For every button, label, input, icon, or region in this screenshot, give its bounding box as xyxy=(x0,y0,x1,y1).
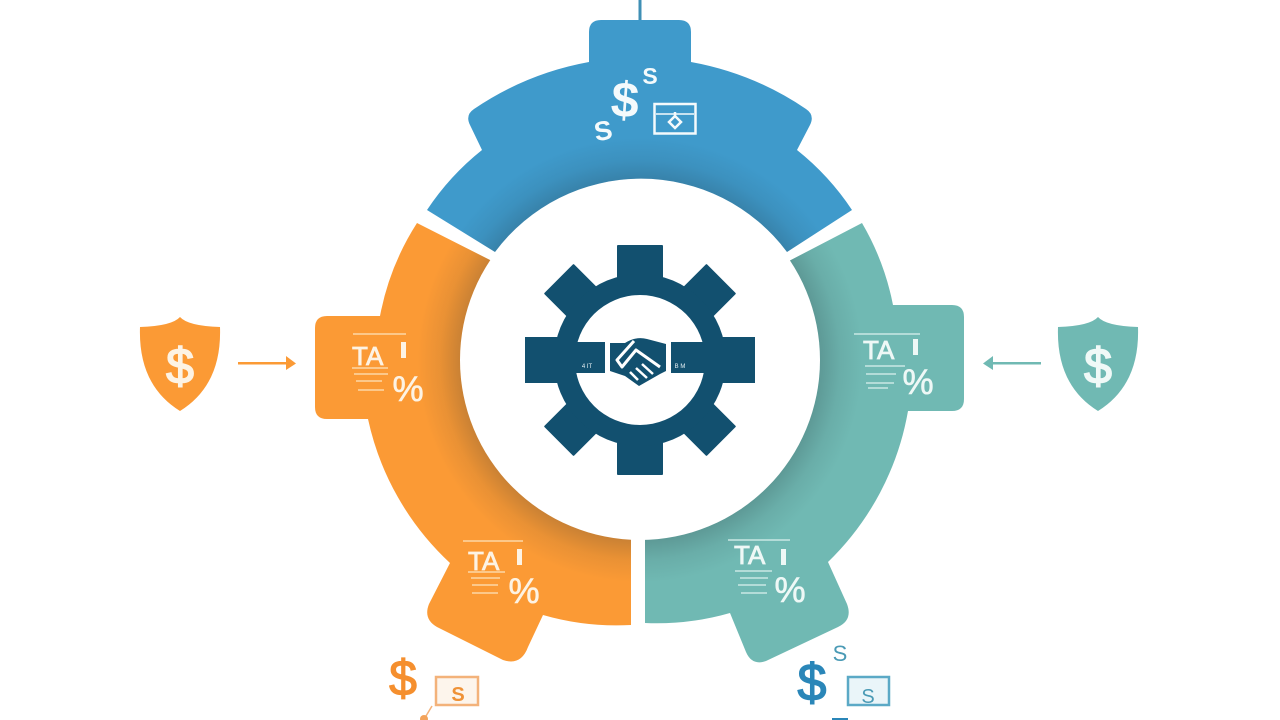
icon: tax percent left xyxy=(352,334,424,409)
icon: tax percent right xyxy=(854,334,934,402)
icon: bottom left dollar and note: S xyxy=(451,684,465,706)
arrow: teal pointing left xyxy=(983,356,1041,370)
icon: tax percent right: % xyxy=(902,363,934,402)
icon: teal shield with dollar: $ xyxy=(1084,338,1112,394)
icon: tax percent bottom left: TA xyxy=(468,546,500,576)
top connector line xyxy=(638,0,642,20)
icon: tax percent left: % xyxy=(392,370,424,409)
center white circle xyxy=(460,180,820,540)
icon: tax percent left: TA xyxy=(352,341,384,371)
handshake bars: B M xyxy=(675,364,685,370)
segment: blue top xyxy=(427,20,852,252)
handshake bars xyxy=(570,342,711,373)
icon: dollar signs and banknote: $ xyxy=(609,71,641,129)
segment: teal lower right xyxy=(645,223,964,662)
icon: bottom right dollar and note xyxy=(798,641,889,720)
handshake bars: 4 IT xyxy=(582,364,592,370)
icon: tax percent bottom right: % xyxy=(774,571,806,610)
icon: dollar signs and banknote xyxy=(592,63,696,147)
icon: teal shield with dollar xyxy=(1058,317,1138,411)
icon: handshake xyxy=(610,338,666,386)
gear left and right teeth xyxy=(525,337,755,383)
icon: tax percent right: TA xyxy=(863,335,895,365)
icon: dollar signs and banknote: S xyxy=(642,63,658,89)
icon: dollar signs and banknote: S xyxy=(592,115,615,147)
icon: bottom left dollar and note xyxy=(389,650,478,720)
arrow: orange pointing right xyxy=(238,356,296,370)
icon: bottom right dollar and note: S xyxy=(861,686,875,708)
icon: tax percent bottom left: % xyxy=(508,572,540,611)
icon: gear with handshake xyxy=(525,245,755,475)
icon: orange shield with dollar: $ xyxy=(166,338,194,394)
icon: orange shield with dollar xyxy=(140,317,220,411)
icon: bottom left dollar and note: $ xyxy=(389,650,417,706)
icon: bottom right dollar and note: S xyxy=(833,641,847,666)
icon: tax percent bottom right: TA xyxy=(734,540,766,570)
icon: tax percent bottom left xyxy=(463,541,540,611)
segment: orange lower left xyxy=(315,223,631,661)
icon: bottom right dollar and note: $ xyxy=(798,654,827,712)
icon: tax percent bottom right xyxy=(728,540,806,610)
